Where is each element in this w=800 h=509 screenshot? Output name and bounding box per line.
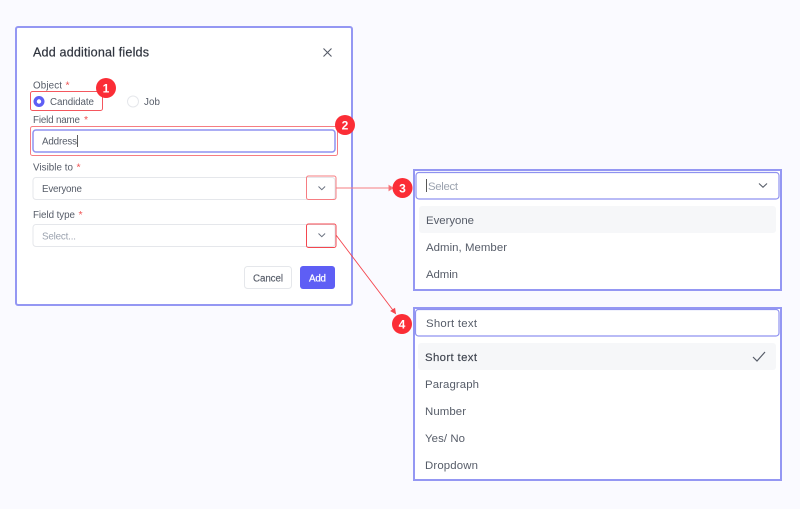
add button [300,266,335,289]
option: admin: Admin [426,269,458,281]
visible to select: Everyone [42,184,83,195]
icon: close [324,48,332,56]
option: admin, member: Admin, Member [426,242,507,254]
panel: add additional fields dialog [16,27,352,305]
option: number: Number [425,406,466,418]
select input: Select [428,181,459,193]
arrow: to dropdown 3 [336,186,393,190]
field type label: Field type [33,210,76,221]
field name input: Address [42,136,77,148]
field name input [33,130,335,152]
icon: check [753,352,765,361]
object label: Object [33,80,62,92]
object label: * [66,80,70,92]
field type select [33,224,335,246]
short text input: Short text [426,318,478,330]
cancel button [244,266,292,288]
option: paragraph: Paragraph [425,379,479,391]
callout box: field type chevron [306,224,336,248]
arrow: to dropdown 4 [336,235,396,314]
panel: field type dropdown [414,308,781,480]
title: Add additional fields [33,46,149,60]
badge 4: 4 [399,318,406,332]
option: yes/no: Yes/ No [425,433,465,445]
add button: Add [309,274,326,284]
panel: visible to dropdown [414,170,781,290]
field name label: * [84,114,88,126]
radio: candidate selected: Candidate [50,97,95,108]
radio: job: Job [144,97,161,108]
option: short text: Short text [425,352,478,364]
badge 1: 1 [103,82,110,96]
callout box: candidate radio [30,92,102,110]
callout box: field name [30,126,338,156]
badge 1 [96,78,116,98]
field type select: Select... [42,232,76,242]
badge 4 [392,314,412,334]
badge 2: 2 [342,118,349,132]
field type label: * [78,209,83,221]
visible to label: Visible to [33,162,74,174]
visible to select [33,178,335,200]
field name label: Field name [33,115,81,126]
visible to label: * [76,162,81,174]
select input [416,172,779,199]
callout box: visible to chevron [306,176,336,200]
cancel button: Cancel [253,274,283,284]
badge 3 [392,178,412,198]
radio: job [128,96,161,108]
option highlight: everyone [419,206,776,233]
radio: candidate selected [34,96,95,108]
badge 3: 3 [399,182,406,196]
option highlight: short text [418,343,776,370]
option: everyone: Everyone [426,215,474,227]
option: dropdown: Dropdown [425,460,478,472]
badge 2 [335,115,355,135]
short text input [416,310,779,336]
